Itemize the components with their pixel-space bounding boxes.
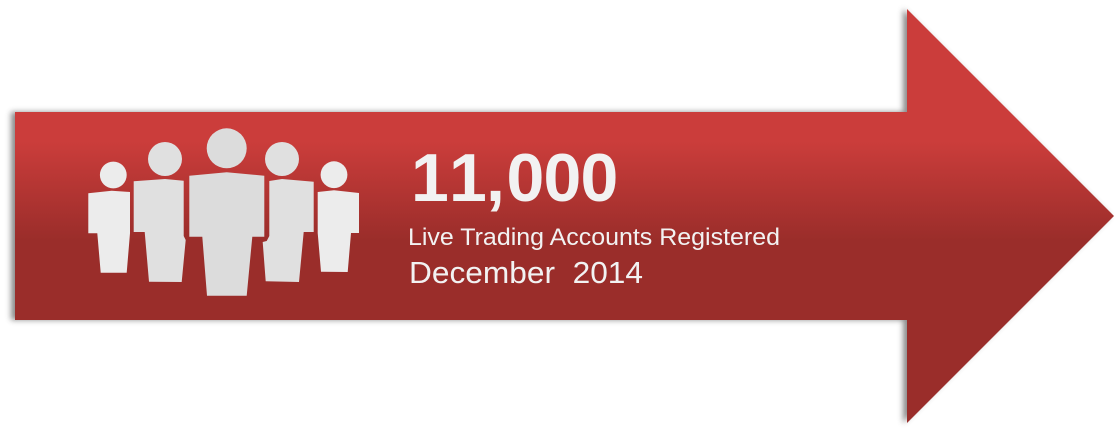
person: inner right [263,142,314,282]
person: far right [318,161,359,272]
label: accounts: Live Trading Accounts Registered [408,224,780,251]
person: far left [88,162,130,273]
person: inner left [134,142,186,282]
icon: group of people [88,128,359,296]
person: center [189,128,264,296]
headline number: 11,000 [411,140,618,216]
label: date: December 2014 [409,255,643,290]
